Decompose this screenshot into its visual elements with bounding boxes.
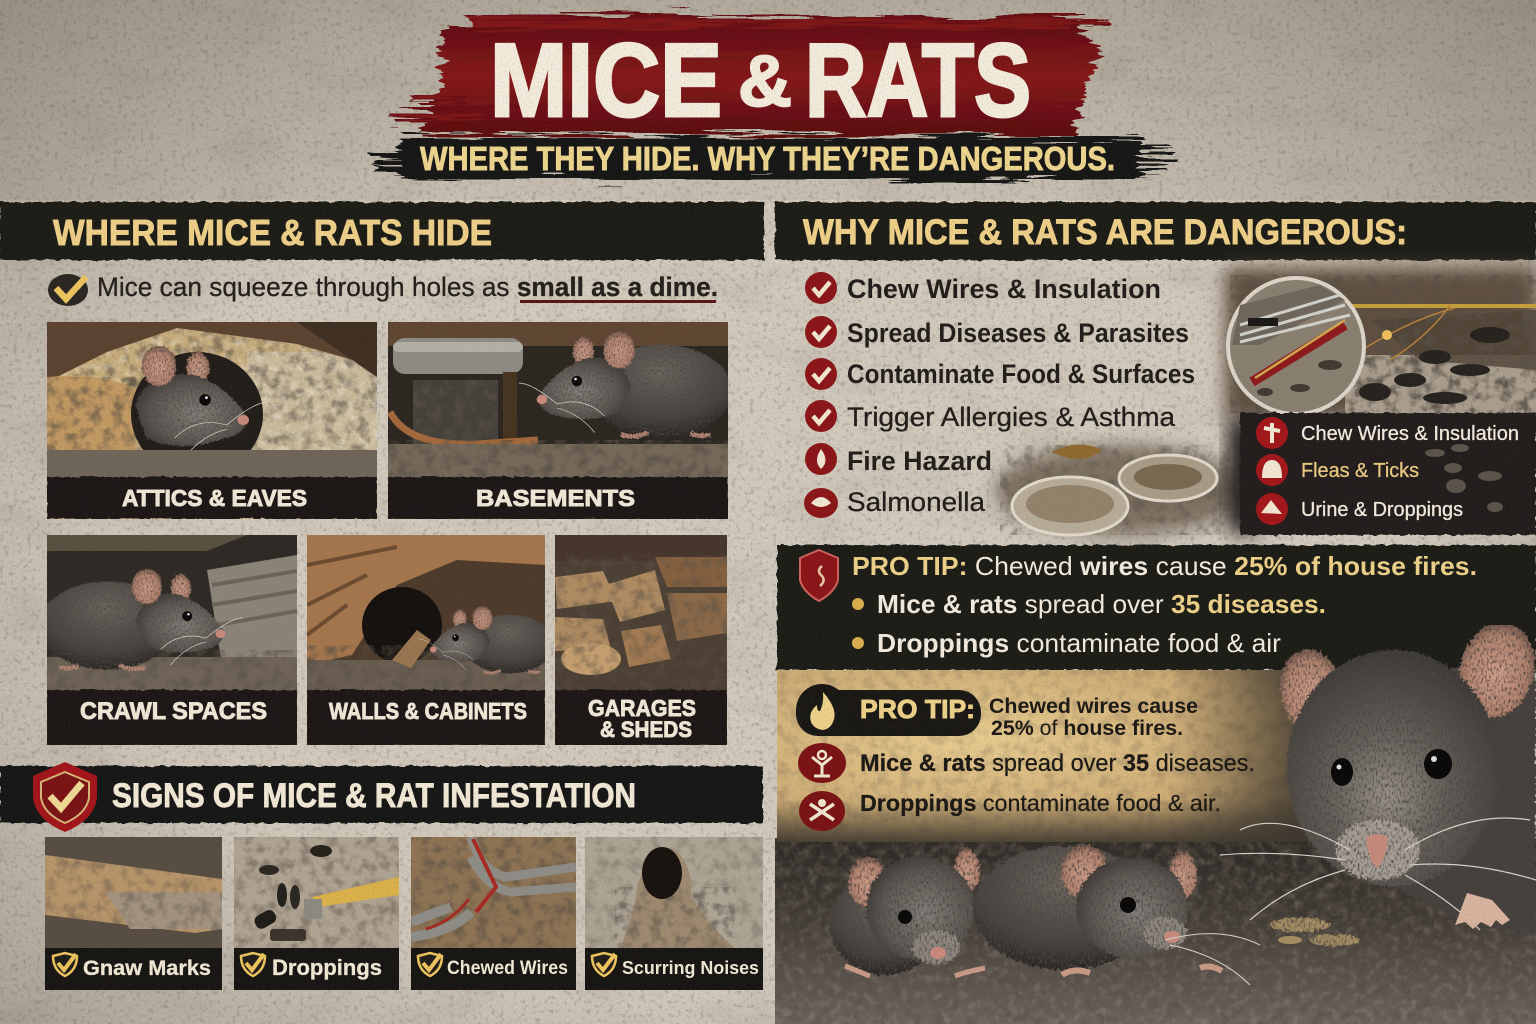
photo: garages and sheds: GARAGES (588, 695, 696, 721)
sign card: droppings: Droppings (272, 955, 382, 980)
legend item: fleas and ticks: Fleas & Ticks (1301, 460, 1419, 482)
photo: basements: BASEMENTS (476, 485, 635, 511)
sign card: gnaw marks (45, 837, 222, 990)
callout: dark pro tip (777, 545, 1536, 670)
tip text: 25% of house fires. (991, 717, 1183, 740)
item: fire hazard (805, 443, 992, 476)
icon: shield check (33, 762, 97, 832)
sign card: scurrying noises (585, 837, 763, 990)
title banner (372, 16, 1175, 179)
legend item: chew wires (1256, 417, 1519, 449)
subtitle: WHERE THEY HIDE. WHY THEY’RE DANGEROUS. (420, 140, 1115, 177)
big mouse (1220, 614, 1536, 935)
tip line two: Mice & rats spread over 35 diseases. (877, 589, 1326, 619)
legend item: urine and droppings: Urine & Droppings (1301, 499, 1463, 521)
bullet (852, 598, 864, 610)
callout: parchment pro tip (777, 670, 1337, 842)
sign card: chewed wires: Chewed Wires (447, 958, 568, 979)
tip: droppings: Droppings contaminate food & air. (860, 790, 1221, 816)
panel: signs of infestation (0, 762, 763, 990)
tip: diseases: Mice & rats spread over 35 diseases. (860, 750, 1255, 777)
photo: chewed wires rubble (1225, 268, 1536, 418)
magnifier circle (1228, 278, 1364, 414)
tip line three: Droppings contaminate food & air (877, 628, 1281, 658)
sign card: chewed wires (411, 837, 576, 990)
item: allergies: Trigger Allergies & Asthma (847, 402, 1176, 432)
legend item: chew wires: Chew Wires & Insulation (1301, 423, 1519, 445)
legend box dark (1228, 413, 1536, 535)
photo: crawl spaces: CRAWL SPACES (80, 698, 267, 725)
tip text (989, 695, 1198, 740)
signs heading bar (0, 766, 763, 823)
panel: why mice and rats are dangerous (775, 202, 1536, 1024)
dime fact line: Mice can squeeze through holes as small as a dime. (97, 272, 718, 302)
item: chew wires: Chew Wires & Insulation (847, 274, 1161, 304)
tip text: Chewed wires cause (989, 695, 1198, 718)
red brush stroke (392, 16, 1110, 134)
photo: walls and cabinets (307, 535, 554, 745)
pro tip pill: PRO TIP: (860, 694, 975, 724)
photo: crawl spaces (39, 535, 297, 745)
title text: MICE (490, 23, 722, 139)
title text second word: RATS (805, 23, 1031, 139)
signs heading bar: SIGNS OF MICE & RAT INFESTATION (112, 777, 636, 815)
heading bar right (775, 202, 1536, 260)
item: salmonella: Salmonella (847, 487, 986, 517)
black brush stroke (372, 137, 1175, 179)
photo: garages and sheds: & SHEDS (600, 717, 692, 742)
small mouse left (830, 848, 985, 976)
crumbs (1270, 918, 1360, 946)
sign card: scurrying noises: Scurring Noises (622, 958, 759, 978)
photo: ground backdrop (775, 838, 1536, 1024)
sign card: droppings (234, 837, 399, 990)
photo: basements (388, 322, 732, 519)
ampersand: & (738, 42, 792, 122)
heading bar: WHERE MICE & RATS HIDE (53, 212, 492, 253)
danger list (804, 272, 1195, 518)
legend item: urine and droppings (1256, 493, 1463, 525)
pro tip pill (796, 684, 981, 736)
photo: contaminated food dishes (995, 444, 1245, 535)
icon: droppings (799, 791, 845, 831)
item: fire hazard: Fire Hazard (847, 446, 992, 476)
photo: mice on ground (830, 614, 1536, 985)
icon: disease (798, 743, 846, 783)
legend item: fleas and ticks (1256, 454, 1419, 486)
bullet two (852, 637, 864, 649)
icon: red shield (800, 550, 838, 601)
sign card: gnaw marks: Gnaw Marks (83, 957, 211, 980)
heading bar right: WHY MICE & RATS ARE DANGEROUS: (803, 213, 1407, 252)
tip line one: PRO TIP: Chewed wires cause 25% of house fires. (852, 551, 1477, 581)
panel: where mice and rats hide (0, 202, 764, 745)
photo: attics and eaves: ATTICS & EAVES (122, 485, 307, 511)
small mouse right (973, 845, 1260, 985)
photo: attics and eaves (47, 322, 377, 519)
photo: walls and cabinets: WALLS & CABINETS (329, 698, 527, 724)
item: contaminate food: Contaminate Food & Surfaces (847, 359, 1195, 389)
item: spread diseases: Spread Diseases & Parasites (847, 318, 1189, 348)
photo: garages and sheds (555, 535, 727, 745)
heading bar (0, 202, 764, 260)
